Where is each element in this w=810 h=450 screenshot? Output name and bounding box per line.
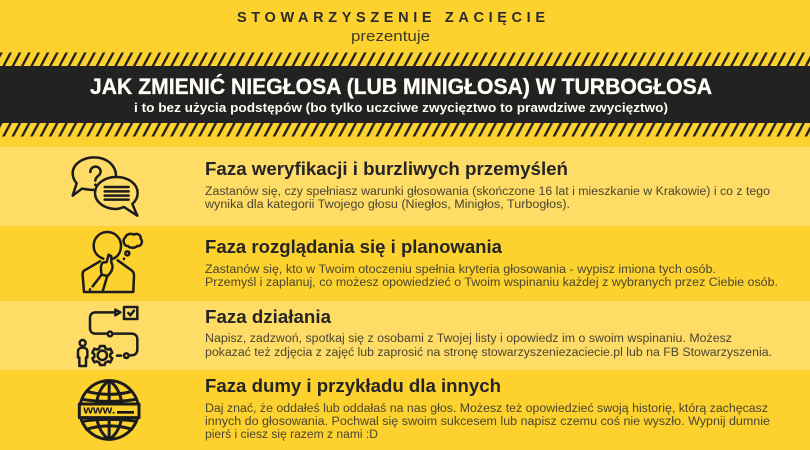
body line 2: pokazać też zdjęcia z zajęć lub zaprosić na stronę stowarzyszeniezaciecie.pl lub na FB Stowarzyszenia. <box>205 347 772 359</box>
panel: phase 4 <box>0 370 810 450</box>
icon: speech bubbles <box>73 157 138 216</box>
icon: globe with www <box>79 381 139 439</box>
panel: phase 1 <box>0 147 810 226</box>
body line 2: Przemyśl i zaplanuj, co możesz opowiedzieć o Twoim wspinaniu każdej z wybranych przez Ciebie osób. <box>205 277 778 289</box>
www label: www. <box>82 405 115 417</box>
heading: Faza działania <box>205 306 332 327</box>
panel: phase 3 <box>0 301 810 370</box>
body line 1: Daj znać, że oddałeś lub oddałaś na nas głos. Możesz też opowiedzieć swoją historię, którą zachęcasz <box>205 403 768 415</box>
presents line: prezentuje <box>351 28 430 45</box>
body line 1: Napisz, zadzwoń, spotkaj się z osobami z Twojej listy i opowiedz im o swoim wspinaniu. Możesz <box>205 333 732 345</box>
body line 1: Zastanów się, czy spełniasz warunki głosowania (skończone 16 lat i mieszkanie w Krakowie) i co z tego <box>205 186 770 198</box>
panel: phase 2 <box>0 226 810 301</box>
subtitle: i to bez użycia podstępów (bo tylko uczciwe zwycięztwo to prawdziwe zwycięztwo) <box>134 100 668 115</box>
heading: Faza rozglądania się i planowania <box>205 236 503 257</box>
body line 3: pierś i ciesz się razem z nami :D <box>205 429 378 441</box>
heading: Faza dumy i przykładu dla innych <box>205 375 501 396</box>
header: organisation name <box>237 10 545 45</box>
title banner <box>0 66 810 123</box>
icon: thinking person <box>83 232 142 292</box>
body line 2: innych do głosowania. Pochwal się swoim sukcesem lub napisz czemu coś nie wyszło. Wypnij dumnie <box>205 416 770 428</box>
icon: process path <box>78 307 137 366</box>
hazard stripe: bottom <box>0 123 810 136</box>
body line 2: wynika dla kategorii Twojego głosu (Niegłos, Minigłos, Turbogłos). <box>204 199 570 211</box>
hazard stripe: top <box>0 52 810 66</box>
body line 1: Zastanów się, kto w Twoim otoczeniu spełnia kryteria głosowania - wypisz imiona tych osób. <box>205 264 716 276</box>
main title: JAK ZMIENIĆ NIEGŁOSA (LUB MINIGŁOSA) W TURBOGŁOSA <box>90 74 712 99</box>
organisation name: STOWARZYSZENIE ZACIĘCIE <box>237 10 545 26</box>
heading: Faza weryfikacji i burzliwych przemyśleń <box>205 158 568 179</box>
